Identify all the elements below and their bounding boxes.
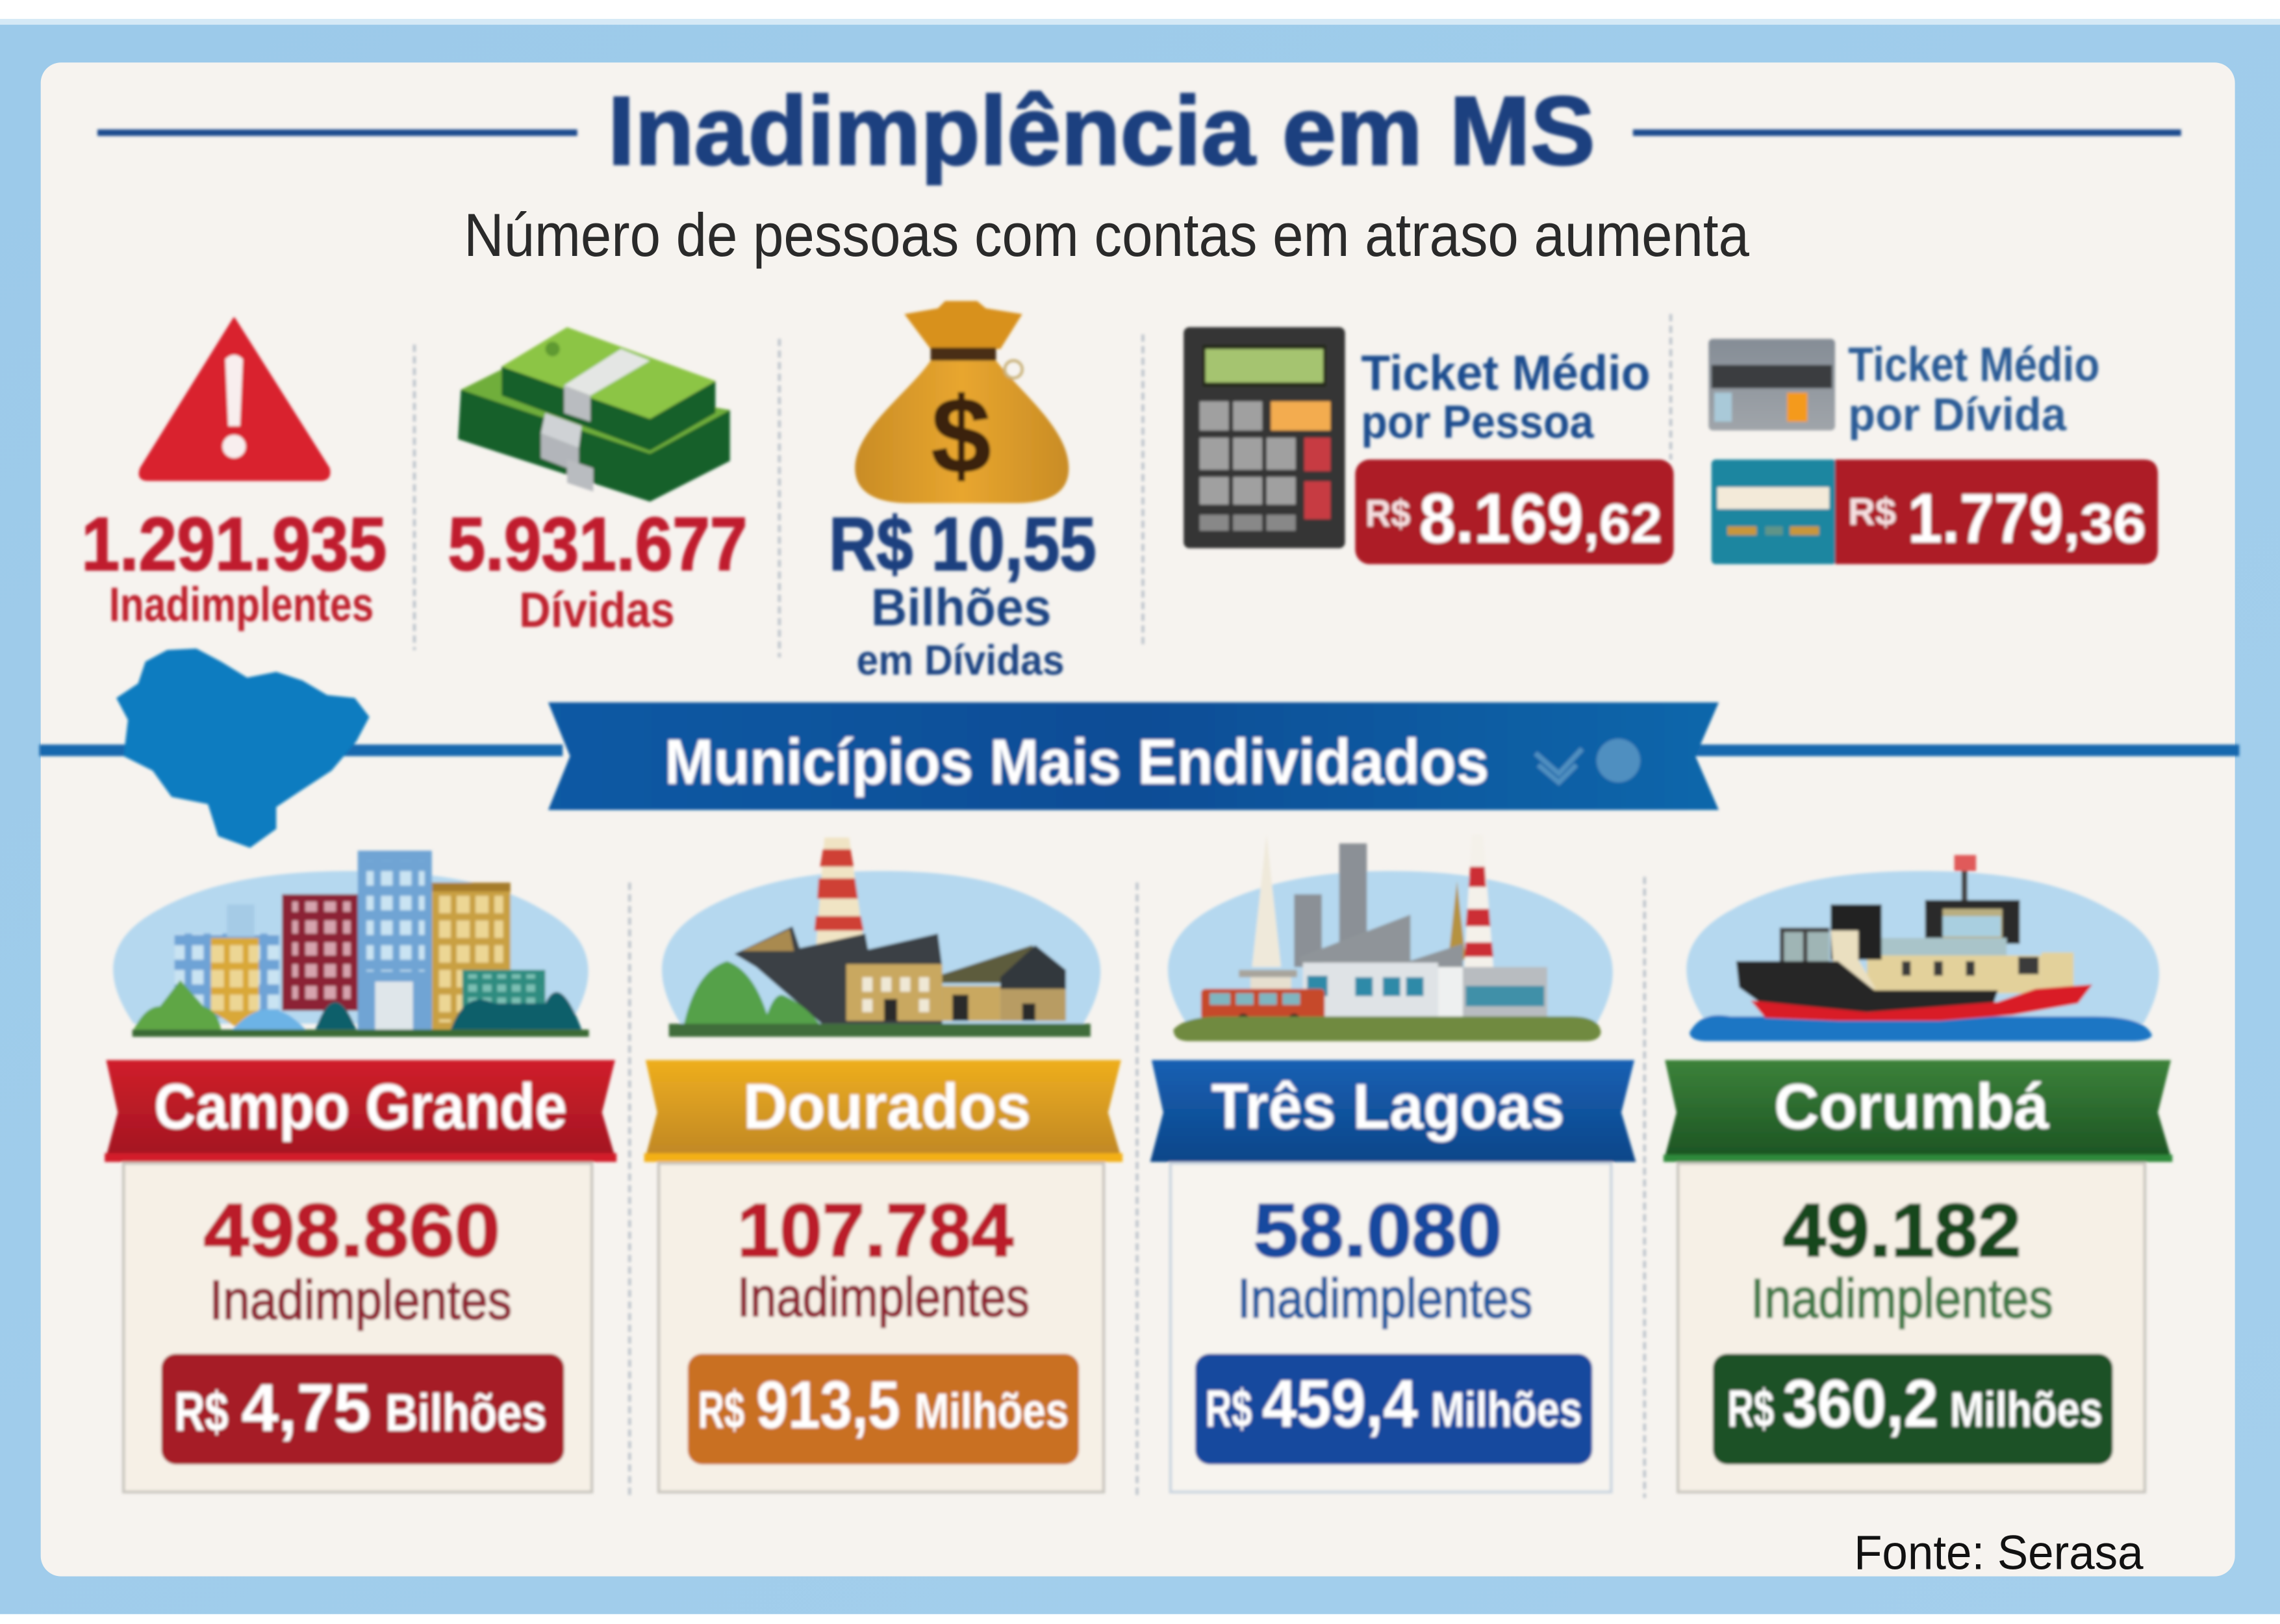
stat: dívidas	[448, 327, 748, 638]
number: 49.182	[1782, 1188, 2021, 1273]
illustration: factory	[662, 837, 1100, 1037]
title: Inadimplência em MS	[608, 76, 1595, 185]
sub-label: em Dívidas	[856, 637, 1065, 684]
icon: money bag: $	[931, 376, 991, 496]
illustration: industrial plant	[1168, 835, 1613, 1041]
ribbon	[1664, 1060, 2172, 1162]
icon: calculator	[1184, 327, 1345, 548]
card	[1678, 1163, 2145, 1492]
value pill	[688, 1354, 1079, 1464]
value box: 1.779	[1908, 479, 2063, 557]
number: 58.080	[1254, 1188, 1502, 1273]
ribbon: Campo Grande	[154, 1071, 567, 1142]
value pill	[161, 1354, 564, 1464]
label: Inadimplentes	[109, 577, 374, 631]
section banner: Municípios Mais Endividados	[665, 726, 1489, 798]
illustration: city	[113, 851, 589, 1037]
column: Três Lagoas	[1150, 835, 1636, 1492]
icon: badge	[1597, 739, 1640, 782]
stat: inadimplentes	[81, 318, 386, 631]
number: 1.291.935	[81, 502, 386, 587]
label: Ticket Médio	[1361, 346, 1651, 401]
value pill	[1713, 1354, 2113, 1464]
number: R$ 10,55	[829, 502, 1096, 587]
icon: money bag	[855, 301, 1069, 503]
label: Bilhões	[871, 579, 1051, 637]
column: Corumbá	[1664, 855, 2172, 1492]
label: Inadimplentes	[1237, 1268, 1532, 1330]
icon: card back	[1708, 339, 1835, 431]
value pill: 913,5	[756, 1367, 900, 1442]
section banner	[548, 702, 1719, 810]
value pill: 360,2	[1782, 1366, 1938, 1441]
number: 5.931.677	[448, 502, 748, 587]
value pill: Milhões	[1950, 1382, 2103, 1438]
subtitle: Número de pessoas com contas em atraso aumenta	[464, 201, 1750, 269]
card	[123, 1163, 592, 1492]
stat: ticket médio por pessoa	[1184, 327, 1674, 565]
value pill: Milhões	[915, 1384, 1069, 1439]
source note: Fonte: Serasa	[1854, 1525, 2144, 1579]
column: Campo Grande	[105, 851, 616, 1492]
value pill: 459,4	[1262, 1366, 1418, 1441]
label	[1361, 346, 1651, 448]
value pill: R$	[1727, 1380, 1774, 1438]
label: por Pessoa	[1361, 396, 1594, 448]
icon: money stacks	[458, 327, 730, 501]
icon: alert triangle	[140, 318, 329, 480]
label: por Dívida	[1848, 389, 2067, 441]
value pill: R$	[175, 1382, 228, 1443]
label: Ticket Médio	[1848, 337, 2099, 391]
value box: R$	[1365, 492, 1410, 535]
icon: map of Mato Grosso do Sul	[116, 648, 370, 848]
icon: card front	[1712, 459, 1836, 565]
label: Inadimplentes	[737, 1267, 1030, 1328]
value box: ,62	[1584, 493, 1662, 555]
column: Dourados	[644, 837, 1122, 1492]
value pill: Bilhões	[385, 1384, 547, 1443]
ribbon: Dourados	[743, 1071, 1031, 1142]
value box	[1835, 459, 2158, 565]
illustration: boat	[1686, 855, 2159, 1041]
title rule right	[1633, 129, 2181, 136]
stat: ticket médio por dívida	[1708, 337, 2158, 565]
title rule left	[97, 129, 577, 136]
value box: 8.169	[1419, 479, 1584, 557]
icon: check mark	[1536, 749, 1582, 782]
card	[659, 1163, 1104, 1492]
value pill: Milhões	[1431, 1382, 1582, 1438]
label	[1848, 337, 2099, 441]
section rule	[39, 744, 2239, 756]
label: Dívidas	[519, 583, 675, 638]
card	[1171, 1163, 1611, 1492]
ribbon	[1150, 1060, 1636, 1162]
label: Inadimplentes	[1751, 1268, 2053, 1330]
value pill: R$	[698, 1381, 744, 1440]
ribbon: Três Lagoas	[1211, 1071, 1565, 1142]
ribbon	[644, 1060, 1122, 1162]
label: Inadimplentes	[209, 1269, 512, 1331]
ribbon	[105, 1060, 616, 1162]
stat dividers	[414, 314, 1671, 1498]
number: 498.860	[203, 1188, 500, 1273]
value pill: R$	[1206, 1380, 1252, 1438]
value box	[1355, 459, 1674, 565]
stat: bilhões em dívidas	[829, 301, 1096, 684]
value box: ,36	[2063, 493, 2146, 555]
number: 107.784	[737, 1188, 1014, 1273]
value box: R$	[1848, 491, 1896, 533]
value pill	[1195, 1354, 1592, 1464]
ribbon: Corumbá	[1774, 1071, 2049, 1142]
value pill: 4,75	[242, 1371, 371, 1445]
